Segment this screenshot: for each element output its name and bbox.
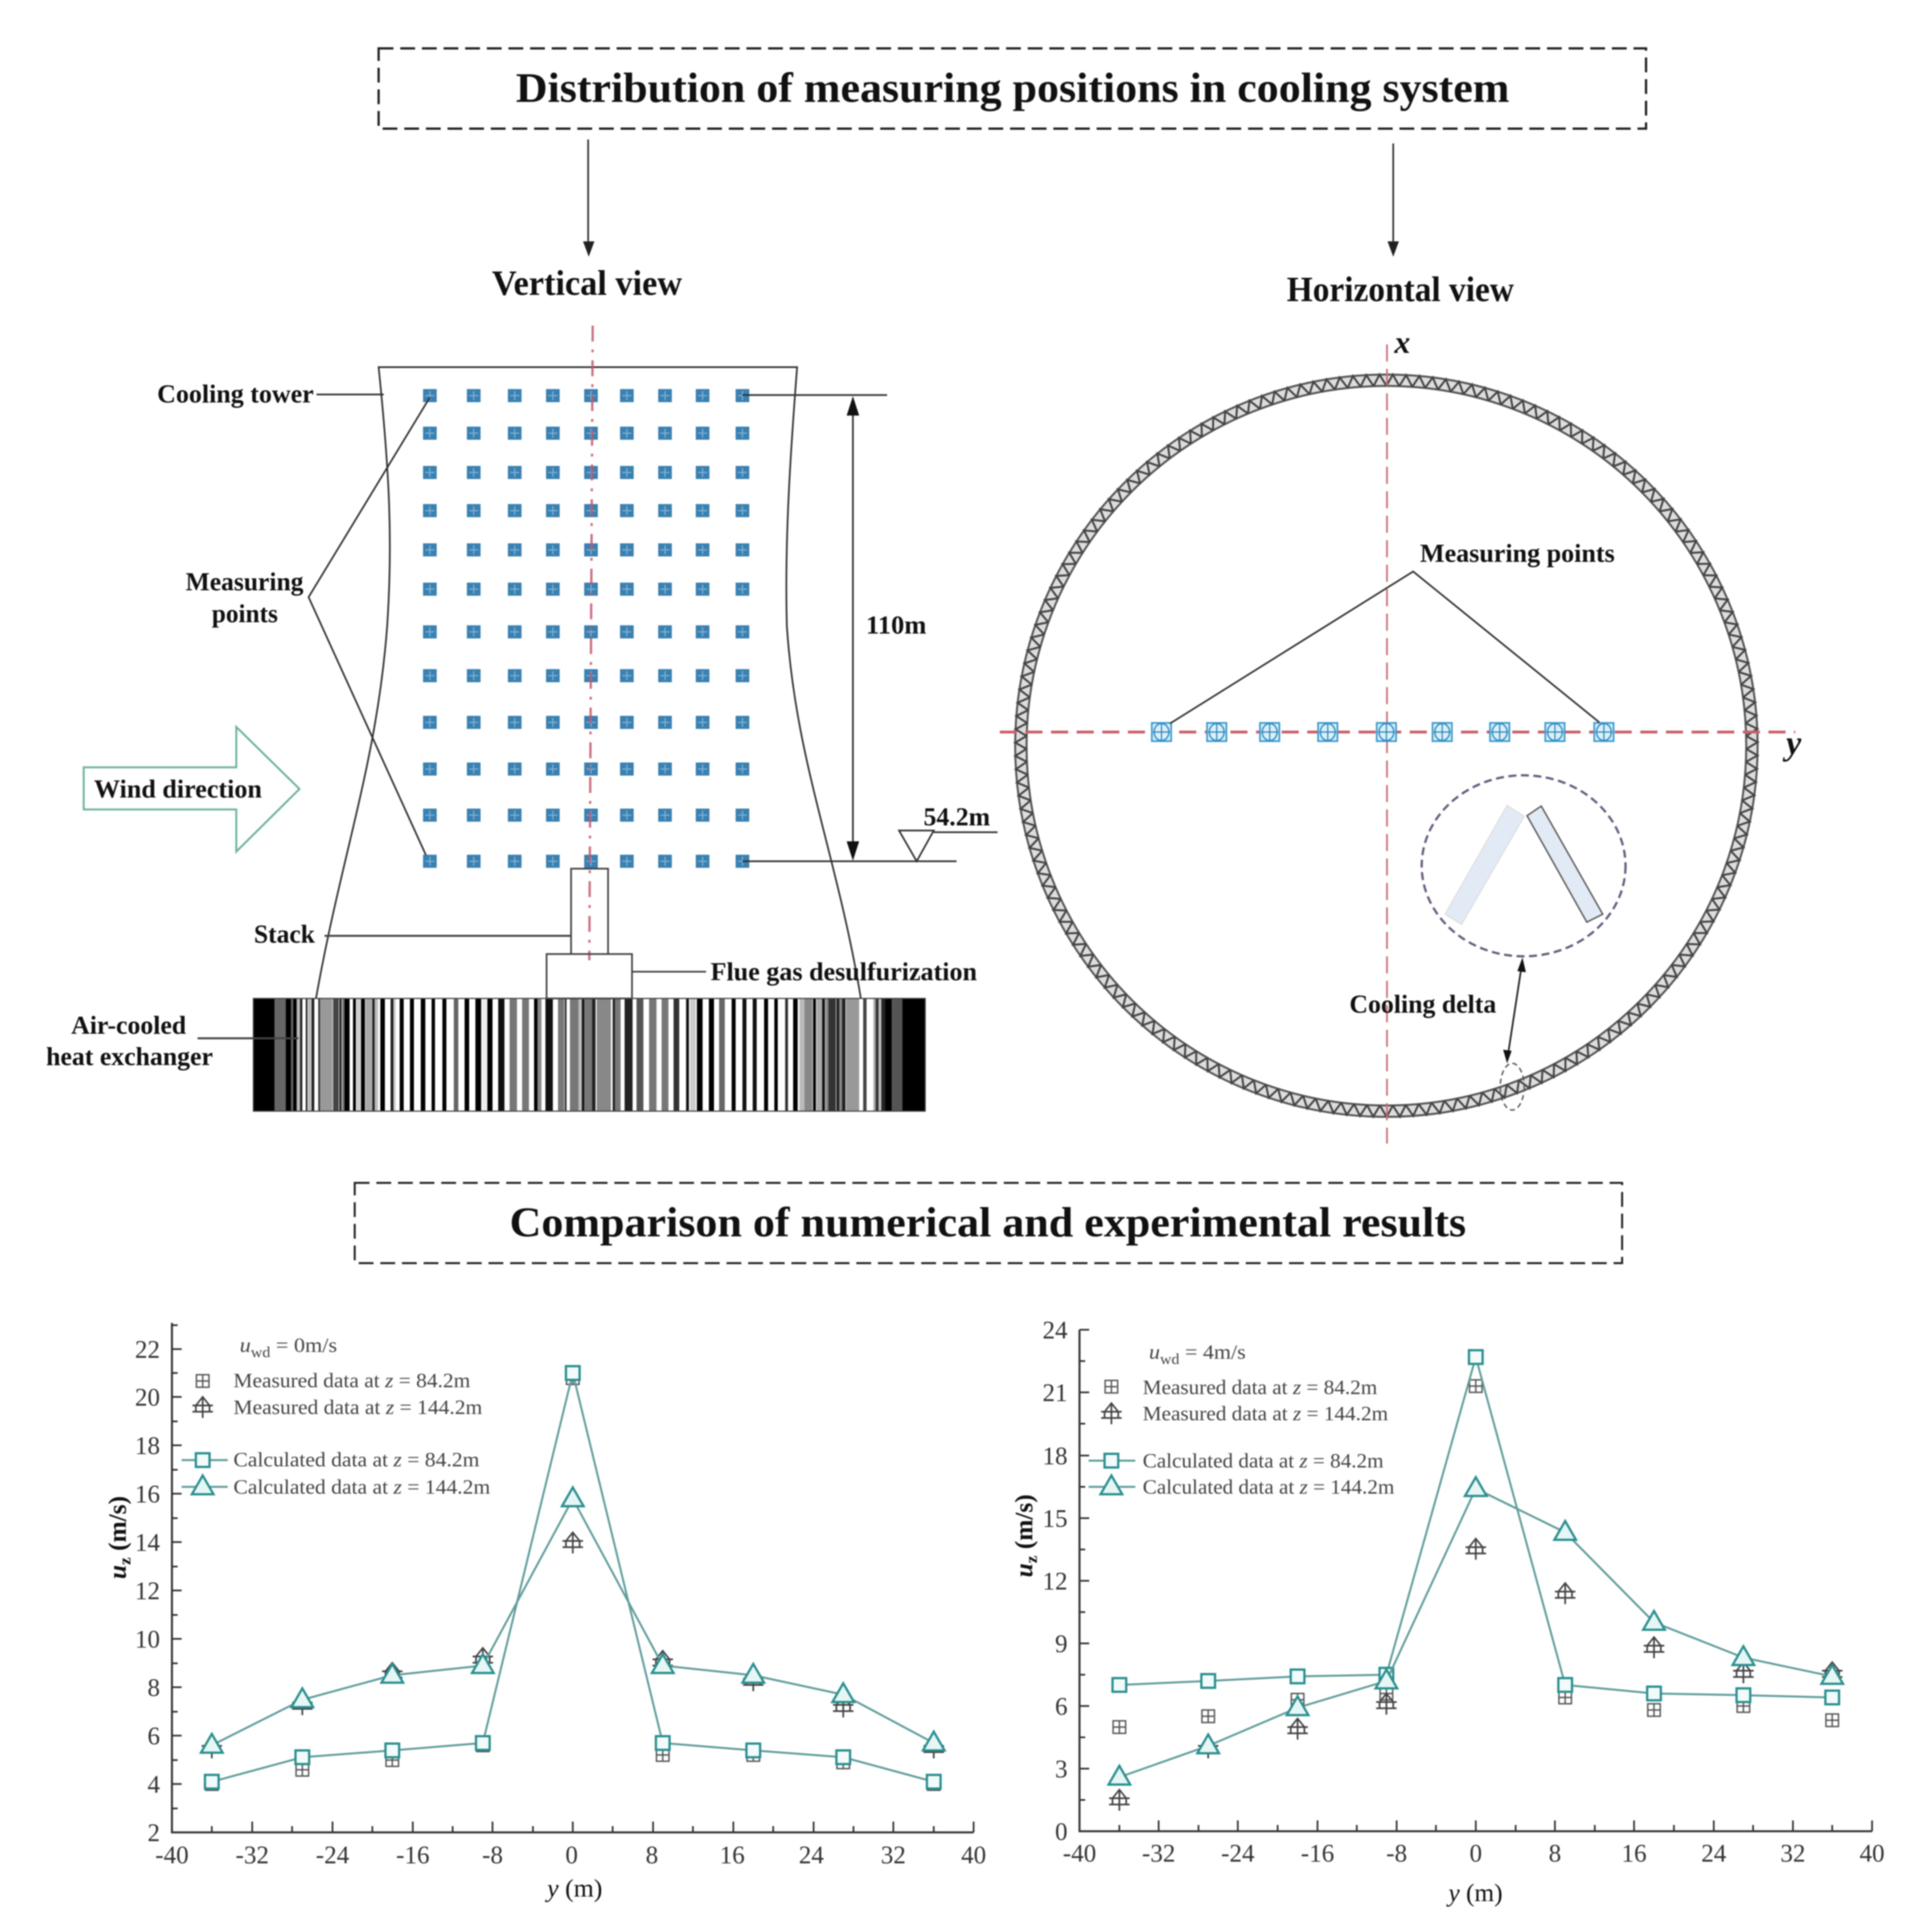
label: cooling tower: Cooling tower [157,379,314,408]
double arrow to detail [1503,957,1526,1063]
x tick labels [155,1841,986,1869]
panel: vertical view diagram [46,326,998,1111]
y tick labels: 24 [1043,1316,1068,1344]
y tick labels: 16 [135,1480,160,1508]
measured series z=144.2 [1109,1539,1842,1811]
y tick labels: 6 [1055,1692,1068,1720]
y tick labels [1043,1316,1068,1845]
cooling tower outline [316,367,861,998]
dimension: 110m [742,395,957,861]
label: measuring points: Measuring points [1420,539,1615,568]
axis label x: x [1394,325,1410,360]
y tick labels: 18 [135,1432,160,1460]
y axis title: z [1022,1556,1041,1563]
y tick labels: 20 [135,1383,160,1411]
legend: Measured data at z = 84.2m [233,1369,470,1392]
legend: u [1149,1341,1160,1363]
arrow to horizontal view [1388,143,1399,257]
y tick labels: 21 [1043,1379,1068,1407]
label: measuring points: points [212,599,278,628]
arrow: wind direction [84,727,299,852]
legend: Calculated data at z = 144.2m [233,1475,490,1498]
heading: horizontal view: Horizontal view [1287,270,1514,309]
y tick labels [135,1335,160,1847]
measuring point grid [423,389,749,868]
axis label y: y [1783,724,1801,762]
calculated series z=144.2 [201,1487,945,1753]
y tick labels: 12 [135,1577,160,1605]
legend: Measured data at z = 84.2m [1143,1376,1377,1399]
y tick labels: 6 [147,1722,160,1750]
label: air-cooled heat exchanger [46,1010,298,1071]
x tick labels: 16 [720,1841,745,1869]
level marker: 54.2m: 54.2m [924,802,990,831]
legend: = 0m/s [270,1334,337,1356]
x tick labels: -32 [1142,1839,1175,1867]
measured series z=144.2 [202,1532,944,1758]
label: measuring points [186,397,430,855]
x tick labels: 0 [565,1841,578,1869]
x tick labels: -40 [1063,1839,1096,1867]
y axis title: u [104,1565,132,1579]
air-cooled heat exchanger [253,998,925,1111]
x tick labels: 24 [799,1841,824,1869]
legend: wd [251,1344,270,1360]
small ellipse on ring [1500,1063,1524,1110]
calculated series z=144.2 [1109,1477,1843,1785]
measured series z=84.2 [206,1372,940,1790]
legend: wd [1160,1351,1180,1367]
x tick labels: -8 [482,1841,503,1869]
x tick labels: -8 [1386,1839,1407,1867]
calculated series z=84.2 [1113,1350,1839,1704]
x tick labels: 24 [1701,1839,1726,1867]
label: flue gas desulfurization: Flue gas desulfurization [711,957,977,986]
label: air-cooled heat exchanger: heat exchanger [46,1042,213,1071]
y tick labels: 22 [135,1335,160,1363]
measuring points row [1152,723,1614,741]
x tick labels: -16 [396,1841,429,1869]
label: measuring points: Measuring [186,567,303,596]
chart: u_wd = 0 m/s [104,1323,986,1902]
title box: comparison: Comparison of numerical and experimental results [510,1199,1466,1246]
arrow to vertical view [583,139,594,257]
x tick labels: 0 [1470,1839,1482,1867]
title box: distribution [379,48,1646,129]
axes [1000,344,1795,1144]
x tick labels: 40 [1860,1839,1885,1867]
x tick labels: -24 [1221,1839,1254,1867]
y tick labels: 18 [1043,1442,1068,1470]
x tick labels: 32 [881,1841,906,1869]
label: cooling delta: Cooling delta [1349,989,1496,1018]
x tick labels: 8 [1549,1839,1561,1867]
y tick labels: 0 [1055,1818,1068,1845]
legend: Measured data at z = 144.2m [1143,1402,1388,1425]
x tick labels [1063,1839,1885,1867]
y tick labels: 4 [147,1770,160,1798]
x tick labels: 40 [961,1841,986,1869]
x axis title: y (m) [1446,1879,1503,1907]
level marker: 54.2m [899,802,998,861]
y tick labels: 14 [135,1528,160,1556]
y tick labels: 15 [1043,1505,1068,1532]
y tick labels: 12 [1043,1567,1068,1595]
label: measuring points [1170,539,1615,724]
x tick labels: -24 [316,1841,349,1869]
y tick labels: 8 [147,1674,160,1701]
legend: Calculated data at z = 144.2m [1143,1475,1394,1498]
legend: Measured data at z = 144.2m [233,1396,482,1419]
measured series z=84.2 [1113,1380,1838,1733]
title box: comparison [355,1183,1622,1263]
x tick labels: -32 [236,1841,269,1869]
legend: u [240,1334,251,1356]
title box: distribution: Distribution of measuring positions in cooling system [516,65,1509,112]
axes and ticks [172,1323,974,1832]
y axis title: (m/s) [1010,1494,1038,1556]
stack [571,869,608,954]
legend: Calculated data at z = 84.2m [1143,1449,1384,1472]
x tick labels: 8 [646,1841,658,1869]
chart: u_wd = 4 m/s [1010,1316,1885,1907]
x tick labels: 32 [1780,1839,1805,1867]
legend: Calculated data at z = 84.2m [233,1448,479,1471]
y axis title: u [1010,1563,1038,1577]
cooling delta ring [875,286,1852,1259]
y tick labels: 10 [135,1625,160,1653]
y tick labels: 3 [1055,1755,1068,1783]
x axis title: y (m) [545,1875,602,1902]
arrow: wind direction: Wind direction [94,774,262,803]
dimension: 110m: 110m [866,610,926,639]
x tick labels: -16 [1301,1839,1334,1867]
y tick labels: 2 [147,1819,160,1847]
x tick labels: -40 [155,1841,188,1869]
legend [182,1334,490,1498]
y axis title: z [116,1557,134,1565]
y axis title: (m/s) [104,1496,132,1557]
label: stack: Stack [254,919,315,948]
cooling delta detail [1422,775,1626,956]
label: air-cooled heat exchanger: Air-cooled [71,1010,186,1039]
panel: horizontal view diagram [875,286,1852,1259]
axes and ticks [1080,1330,1872,1831]
x tick labels: 16 [1622,1839,1647,1867]
calculated series z=84.2 [205,1366,941,1789]
heading: vertical view: Vertical view [492,264,682,303]
flue gas desulfurization unit [547,954,632,998]
legend: = 4m/s [1180,1341,1246,1363]
legend [1089,1341,1394,1498]
center line [589,326,593,960]
y tick labels: 9 [1055,1630,1068,1658]
